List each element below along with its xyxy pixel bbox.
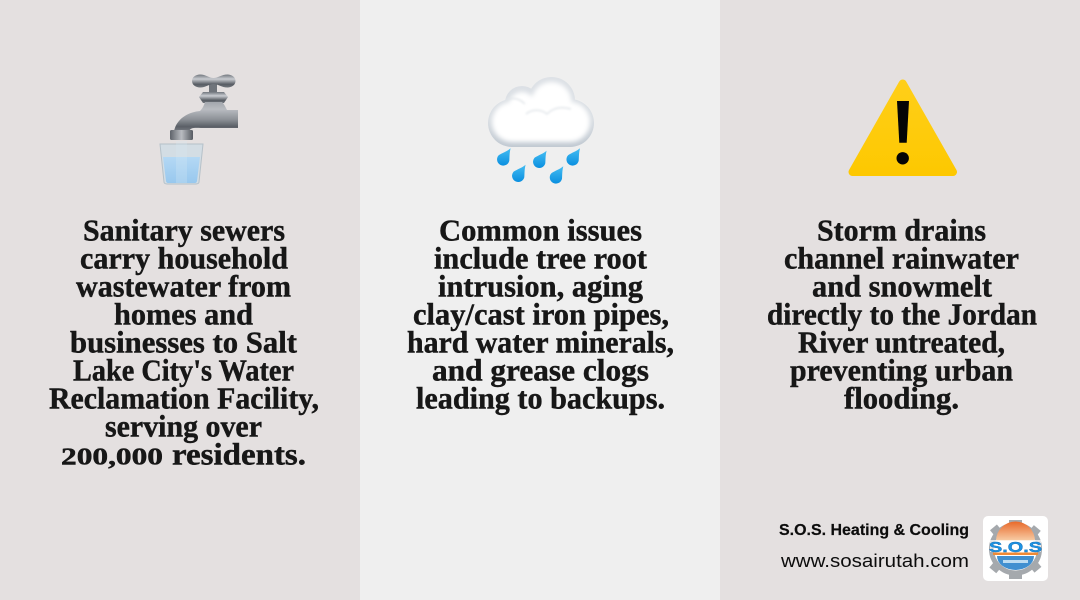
panel: common issues [360,0,720,600]
heading: common issues text: clay/cast iron pipes, [413,296,669,332]
heading: sanitary sewers text: wastewater from [76,268,291,304]
heading: sanitary sewers text: Lake City's Water [73,352,294,388]
heading: sanitary sewers text: 200,000 [61,444,163,470]
icon: S.O.S logo [983,516,1048,581]
heading: sanitary sewers text: carry household [80,240,288,276]
heading: storm drains text: River untreated, [798,324,1005,360]
heading: storm drains text: directly to the Jordan [767,296,1037,332]
heading: storm drains text: channel rainwater [784,240,1019,276]
heading: common issues text: Common issues [439,212,642,248]
heading: common issues text [407,212,674,416]
icon: faucet with glass of water [160,74,238,184]
heading: common issues text: leading to backups. [416,380,665,416]
heading: storm drains text: preventing urban [790,352,1013,388]
panel: sanitary sewers [0,0,360,600]
heading: storm drains text: flooding. [844,380,959,416]
heading: sanitary sewers text: Reclamation Facility, [49,380,319,416]
icon: rain cloud [488,77,594,184]
heading: sanitary sewers text: homes and [114,296,253,332]
heading: sanitary sewers text: serving over [105,408,262,444]
heading: sanitary sewers text [49,212,319,472]
footer: company name: S.O.S. Heating & Cooling [779,522,969,539]
heading: common issues text: and grease clogs [432,352,649,388]
footer: website: www.sosairutah.com [780,551,969,571]
heading: sanitary sewers text: residents. [172,436,306,472]
heading: common issues text: intrusion, aging [438,268,643,304]
icon: warning sign [852,84,953,172]
heading: sanitary sewers text: businesses to Salt [70,324,298,360]
heading: common issues text: include tree root [434,240,648,276]
heading: storm drains text: Storm drains [817,212,986,248]
heading: sanitary sewers text: Sanitary sewers [83,212,285,248]
heading: common issues text: hard water minerals, [407,324,674,360]
heading: storm drains text [767,212,1037,416]
icon: S.O.S logo: S.O.S [989,539,1042,556]
heading: storm drains text: and snowmelt [812,268,993,304]
panel: storm drains [720,0,1080,600]
